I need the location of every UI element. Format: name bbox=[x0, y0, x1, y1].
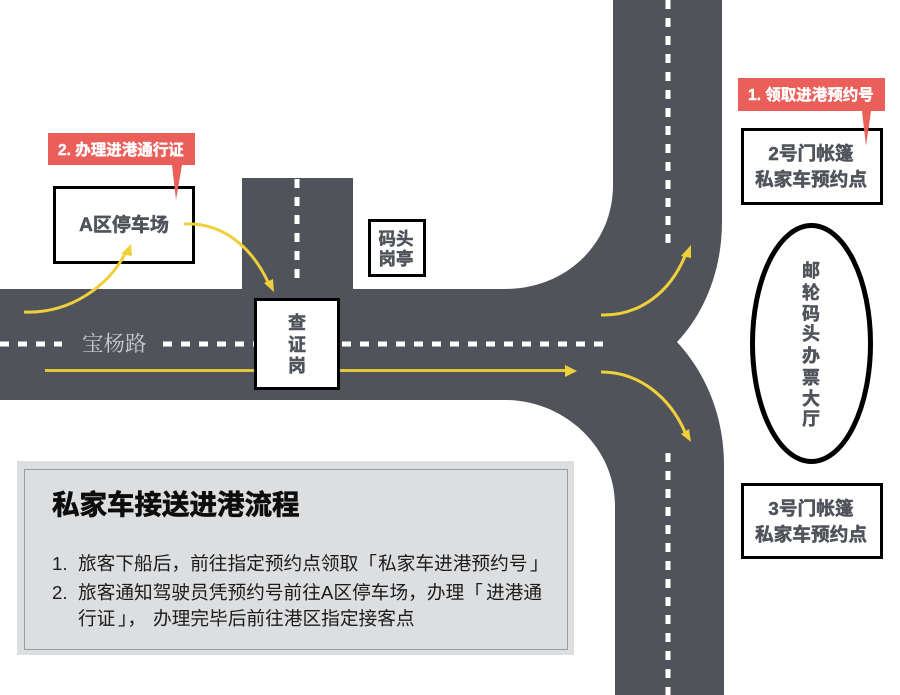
ellipse: ticket hall: 邮 bbox=[802, 261, 820, 281]
ellipse: ticket hall bbox=[752, 226, 870, 462]
process steps: 办理完毕后前往港区指定接客点 bbox=[153, 608, 415, 629]
box: checkpoint: 岗 bbox=[288, 356, 306, 376]
arrow: road to parking lot bbox=[24, 244, 132, 312]
ellipse: ticket hall: 轮 bbox=[802, 283, 820, 303]
box: pier kiosk: 码头 bbox=[378, 229, 414, 249]
process steps: 进港通 bbox=[486, 582, 542, 603]
box: gate 3 tent: 3号门帐篷 bbox=[768, 498, 854, 519]
process steps: 旅客通知驾驶员凭预约号前往A区停车场，办理「 bbox=[78, 582, 483, 603]
box: gate 2 tent: 2号门帐篷 bbox=[768, 143, 854, 164]
arrow: turn south bbox=[601, 372, 691, 442]
ellipse: ticket hall: 头 bbox=[802, 324, 820, 344]
road label: 宝杨路 bbox=[82, 332, 147, 356]
box: checkpoint bbox=[256, 300, 338, 388]
box: pier kiosk bbox=[370, 220, 424, 276]
process steps: 」 bbox=[530, 553, 549, 574]
panel: process description bbox=[17, 461, 574, 655]
box: gate 2 tent bbox=[742, 130, 882, 204]
box: gate 3 tent bbox=[742, 484, 882, 558]
ellipse: ticket hall: 票 bbox=[802, 368, 820, 388]
arrow: straight along road bbox=[45, 365, 577, 377]
ellipse: ticket hall: 码 bbox=[802, 304, 820, 324]
road centre dashes bbox=[0, 0, 668, 695]
callout: step 2: 2. 办理进港通行证 bbox=[58, 141, 184, 159]
process steps: 私家车进港预约号 bbox=[378, 553, 528, 574]
ellipse: ticket hall: 办 bbox=[802, 346, 820, 366]
ellipse: ticket hall: 厅 bbox=[802, 409, 820, 429]
box: checkpoint: 查 bbox=[288, 313, 306, 333]
ellipse: ticket hall: 大 bbox=[802, 389, 820, 409]
arrow: turn north bbox=[601, 245, 691, 315]
panel heading: 私家车接送进港流程 bbox=[52, 489, 300, 520]
process steps: 旅客下船后，前往指定预约点领取「 bbox=[78, 553, 377, 574]
callout: step 1 bbox=[738, 78, 885, 146]
box: checkpoint: 证 bbox=[288, 335, 306, 355]
box: parking area A bbox=[54, 188, 194, 262]
callout: step 2 bbox=[48, 133, 195, 200]
box: gate 2 tent: 私家车预约点 bbox=[755, 169, 867, 190]
arrow: parking lot to checkpoint bbox=[184, 224, 274, 292]
process steps: 1. bbox=[52, 553, 68, 574]
box: parking area A: A区停车场 bbox=[79, 213, 169, 236]
box: gate 3 tent: 私家车预约点 bbox=[755, 524, 867, 545]
process steps: 2. bbox=[52, 582, 68, 603]
process steps: 」， bbox=[118, 608, 146, 629]
box: pier kiosk: 岗亭 bbox=[378, 249, 414, 269]
callout: step 1: 1. 领取进港预约号 bbox=[748, 86, 874, 104]
process steps: 行证 bbox=[78, 608, 115, 629]
